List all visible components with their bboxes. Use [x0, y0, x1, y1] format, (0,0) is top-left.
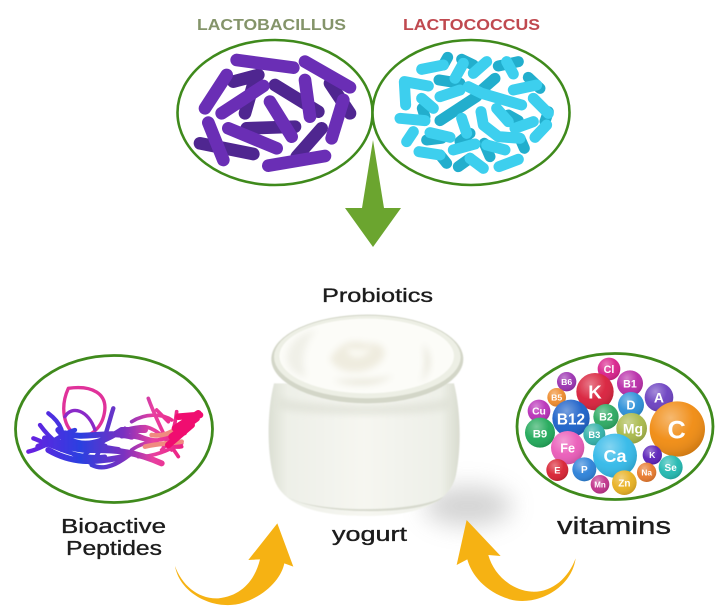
icon: vitamin and mineral spheres: Se — [665, 463, 677, 474]
icon: vitamin and mineral spheres: Mn — [594, 480, 606, 489]
arrow: green downward — [345, 140, 401, 247]
icon: vitamin and mineral spheres: Mg — [623, 420, 643, 436]
icon: vitamin and mineral spheres: E — [554, 465, 560, 475]
label: vitamins: vitamins — [557, 513, 671, 540]
label: yogurt: yogurt — [332, 524, 408, 546]
icon: vitamin and mineral spheres: Fe — [560, 441, 575, 455]
icon: vitamin and mineral spheres: B3 — [588, 430, 600, 440]
label: bioactive peptides — [61, 516, 166, 560]
panel: lactococcus circle — [372, 40, 570, 185]
icon: vitamin and mineral spheres: P — [581, 465, 588, 476]
icon: vitamin and mineral spheres: K — [588, 381, 602, 402]
icon: vitamin and mineral spheres: B9 — [533, 428, 547, 440]
panel: bioactive peptides circle — [16, 356, 212, 502]
icon: vitamin and mineral spheres: C — [668, 416, 686, 444]
arrow: yellow right curved — [457, 520, 576, 601]
icon: vitamin and mineral spheres: B5 — [551, 393, 562, 403]
jar rim — [271, 315, 463, 403]
image: yogurt jar — [269, 315, 463, 516]
label: bioactive peptides: Peptides — [66, 538, 162, 560]
heading: Lactobacillus: LACTOBACILLUS — [197, 17, 346, 34]
yogurt surface — [279, 319, 454, 393]
icon: vitamin and mineral spheres — [525, 358, 705, 495]
icon: vitamin and mineral spheres: A — [654, 389, 664, 405]
heading: Lactococcus: LACTOCOCCUS — [403, 17, 540, 34]
icon: vitamin and mineral spheres: B1 — [623, 378, 637, 390]
icon: vitamin and mineral spheres: Cl — [604, 364, 614, 376]
icon: peptide strands — [28, 388, 200, 467]
icon: vitamin and mineral spheres: B2 — [599, 412, 613, 424]
icon: vitamin and mineral spheres: D — [626, 399, 636, 413]
panel: vitamins circle — [517, 354, 713, 500]
panel: lactobacillus circle — [178, 40, 372, 185]
arrow: yellow left curved — [175, 523, 293, 605]
icon: vitamin and mineral spheres: K — [649, 450, 656, 460]
heading: Probiotics: Probiotics — [322, 286, 433, 307]
icon: vitamin and mineral spheres: Ca — [603, 446, 627, 466]
icon: purple rod bacteria — [200, 60, 350, 166]
icon: vitamin and mineral spheres: B12 — [557, 411, 585, 428]
jar body — [269, 383, 460, 516]
icon: vitamin and mineral spheres: Zn — [618, 479, 630, 490]
icon: vitamin and mineral spheres: B6 — [561, 377, 572, 387]
icon: vitamin and mineral spheres: Na — [641, 467, 652, 477]
label: bioactive peptides: Bioactive — [61, 516, 166, 538]
icon: cyan chain bacteria — [400, 57, 548, 168]
jar shadow — [424, 486, 512, 526]
icon: vitamin and mineral spheres: Cu — [532, 407, 546, 418]
